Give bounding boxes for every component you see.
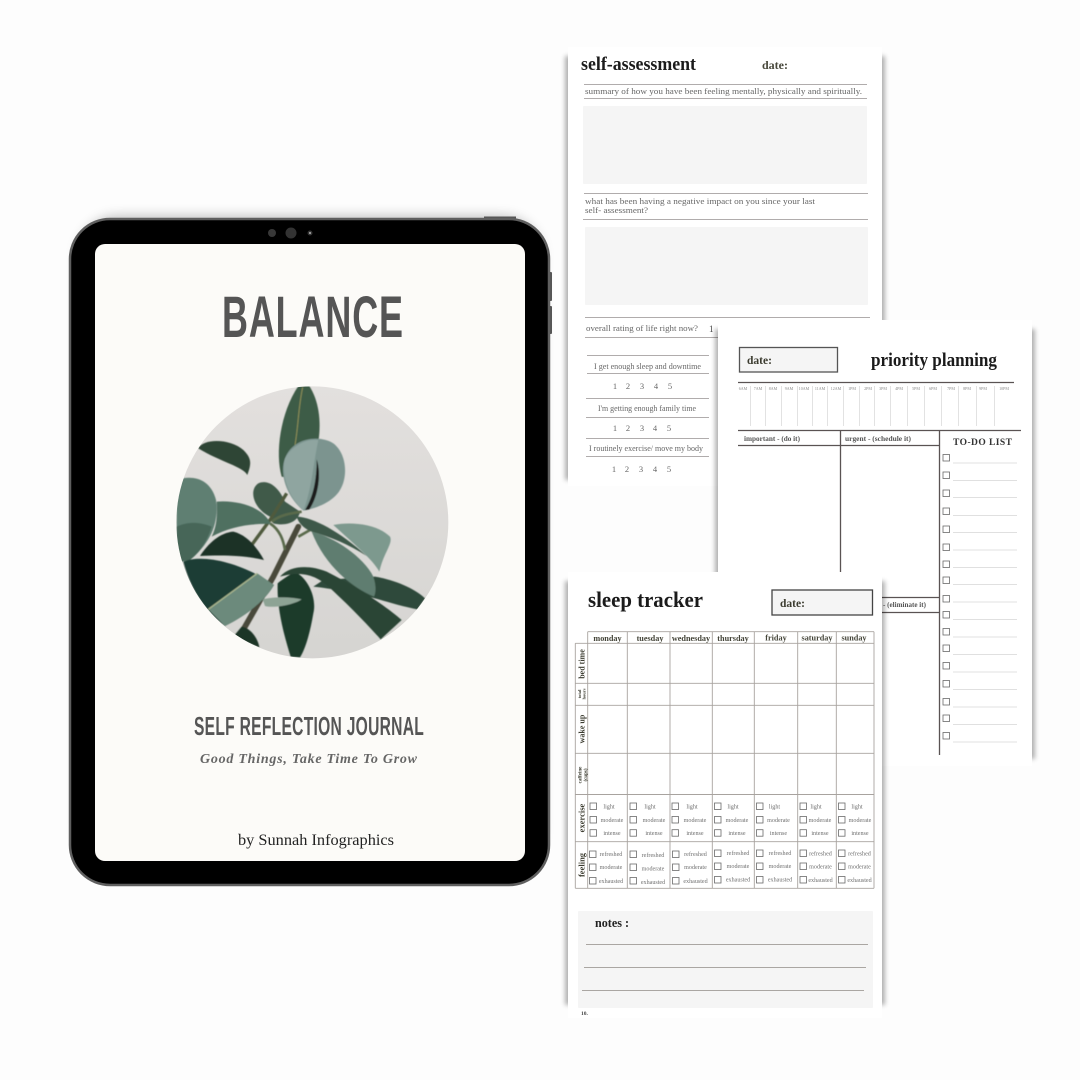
page: priority planning — [715, 320, 1035, 766]
answer box one — [583, 106, 867, 184]
infographic canvas — [68, 54, 1038, 1015]
rating item: sleep: 2 — [626, 381, 630, 391]
hourly timeline: 7PM — [947, 386, 955, 391]
weekday headers: saturday — [802, 634, 833, 642]
row labels: hours — [582, 688, 586, 700]
feeling labels — [599, 850, 872, 886]
page: sleep tracker — [565, 572, 885, 1018]
feeling labels: exhausted — [808, 878, 833, 884]
weekday headers: thursday — [717, 634, 750, 643]
rating item: sleep: 3 — [640, 381, 644, 391]
weekday headers: tuesday — [637, 634, 664, 643]
hourly timeline: 1PM — [848, 386, 856, 391]
sleep date box — [772, 590, 872, 615]
row labels — [576, 649, 589, 877]
exercise labels: light — [810, 804, 822, 810]
notes panel: notes : — [595, 916, 629, 930]
priority heading: priority planning — [871, 350, 997, 371]
row labels: exercise — [576, 803, 586, 832]
feeling labels: exhausted — [726, 878, 750, 884]
priority matrix — [738, 430, 1021, 755]
feeling labels: refreshed — [727, 850, 749, 857]
exercise labels: light — [851, 804, 863, 810]
prompt one: summary of how you have been feeling mentally, physically and spiritually. — [585, 86, 862, 96]
sleep date box: date: — [780, 596, 805, 610]
sleep sheet — [568, 572, 882, 1018]
feeling labels: refreshed — [642, 852, 664, 859]
to-do list heading: TO-DO LIST — [953, 438, 1013, 448]
priority matrix: important - (do it) — [744, 434, 800, 443]
exercise labels: intense — [770, 831, 787, 837]
feeling checkboxes — [590, 850, 845, 884]
feeling labels: refreshed — [600, 851, 622, 858]
weekday headers: wednesday — [672, 634, 711, 643]
hourly timeline: 10AM — [799, 386, 810, 391]
rating item: sleep: 5 — [668, 381, 672, 391]
author: by Sunnah Infographics — [238, 832, 394, 849]
weekday headers: sunday — [841, 634, 867, 642]
priority sheet — [718, 320, 1032, 766]
tablet cameras — [268, 228, 312, 238]
feeling labels: exhausted — [641, 880, 665, 886]
exercise labels: moderate — [643, 818, 666, 824]
priority date box: date: — [747, 353, 772, 367]
plant photo circle — [176, 386, 448, 658]
row labels: total — [577, 689, 582, 698]
rating item: sleep: I get enough sleep and downtime — [594, 361, 701, 371]
rating item: family — [586, 398, 709, 433]
overall rating: overall rating of life right now? — [586, 323, 698, 333]
rating item: sleep — [587, 356, 709, 391]
feeling labels: moderate — [684, 865, 707, 871]
exercise labels: intense — [811, 831, 829, 837]
exercise labels: intense — [728, 831, 746, 837]
hourly timeline: 5PM — [912, 386, 920, 391]
feeling labels: moderate — [600, 865, 623, 871]
feeling labels: exhausted — [768, 878, 792, 884]
exercise labels: moderate — [601, 818, 624, 824]
feeling labels: exhausted — [599, 879, 623, 885]
rating item: family: 4 — [653, 423, 658, 433]
hourly timeline: 9PM — [979, 386, 987, 391]
prompt two: self- assessment? — [585, 205, 648, 215]
feeling labels: refreshed — [769, 850, 791, 857]
weekday headers: monday — [593, 634, 623, 643]
exercise labels: light — [644, 804, 656, 810]
weekday headers: friday — [765, 634, 788, 642]
hourly timeline: 10PM — [999, 386, 1009, 391]
tablet mockup — [70, 216, 552, 885]
tablet screen — [95, 244, 525, 861]
rating item: exercise — [586, 438, 709, 474]
exercise checkboxes — [590, 803, 845, 836]
overall rating: 1 — [709, 324, 714, 334]
hourly timeline: 3PM — [879, 386, 887, 391]
rating item: family: 1 — [613, 423, 617, 433]
rating item: family: 2 — [626, 423, 630, 433]
rating item: family: 5 — [667, 423, 671, 433]
feeling labels: exhausted — [847, 878, 872, 884]
self-assessment heading: self-assessment — [581, 55, 697, 75]
tracker grid — [575, 632, 874, 888]
rating item: exercise: 1 — [612, 464, 616, 474]
rating item: sleep: 4 — [654, 381, 659, 391]
hourly timeline: 12AM — [831, 386, 842, 391]
rating item: exercise: 3 — [639, 464, 643, 474]
hourly timeline: 2PM — [864, 386, 872, 391]
tagline: Good Things, Take Time To Grow — [200, 752, 418, 767]
weekday headers — [593, 634, 867, 643]
prompt two: what has been having a negative impact on you since your last — [585, 196, 816, 206]
exercise labels: moderate — [849, 818, 872, 824]
sleep heading: sleep tracker — [588, 587, 703, 612]
exercise labels: intense — [686, 831, 704, 837]
exercise labels: intense — [851, 831, 869, 837]
row labels: caffeine — [578, 766, 584, 783]
prompt two — [585, 196, 816, 215]
page: self-assessment — [565, 47, 885, 486]
priority date box — [740, 348, 838, 372]
feeling labels: refreshed — [848, 850, 871, 858]
page number: 10. — [581, 1011, 588, 1017]
subtitle: SELF REFLECTION JOURNAL — [194, 712, 424, 741]
self-assessment sheet — [568, 47, 882, 486]
row labels: (cups) — [584, 768, 589, 782]
feeling labels: refreshed — [684, 851, 707, 858]
exercise labels: moderate — [684, 818, 707, 824]
to-do checkboxes — [943, 454, 950, 739]
feeling labels: moderate — [769, 864, 792, 870]
exercise labels: light — [686, 804, 698, 810]
rating item: family: 3 — [640, 423, 644, 433]
rating item: exercise: 2 — [625, 464, 629, 474]
tablet body — [70, 219, 549, 885]
row labels: bed time — [578, 649, 586, 679]
hourly timeline: 7AM — [754, 386, 763, 391]
row labels: feeling — [576, 852, 586, 877]
rating item: sleep: 1 — [613, 381, 617, 391]
hourly timeline — [738, 382, 1014, 426]
to-do lines — [953, 463, 1017, 742]
hourly timeline: 8PM — [963, 386, 971, 391]
hourly timeline: 11AM — [815, 386, 826, 391]
rating item: family: I'm getting enough family time — [598, 403, 696, 413]
exercise labels: light — [727, 804, 739, 810]
self-assessment date label: date: — [762, 60, 788, 72]
rating item: exercise: 4 — [653, 464, 658, 474]
priority matrix: urgent - (schedule it) — [845, 434, 911, 443]
exercise labels: intense — [603, 831, 621, 837]
feeling labels: moderate — [642, 866, 665, 872]
row labels: wake up — [578, 714, 586, 743]
rating item: exercise: I routinely exercise/ move my body — [589, 443, 704, 453]
feeling labels: exhausted — [683, 879, 708, 885]
hourly timeline: 6PM — [929, 386, 937, 391]
hourly timeline: 8AM — [769, 386, 778, 391]
exercise labels: intense — [645, 831, 663, 837]
exercise labels: moderate — [767, 818, 790, 824]
exercise labels: moderate — [726, 818, 749, 824]
hourly timeline: 9AM — [785, 386, 794, 391]
feeling labels: moderate — [848, 864, 871, 870]
exercise labels — [601, 804, 872, 837]
rating item: exercise: 5 — [667, 464, 671, 474]
tablet side buttons — [484, 216, 552, 334]
hourly timeline: 4PM — [895, 386, 903, 391]
exercise labels: moderate — [809, 818, 832, 824]
section rules — [583, 84, 870, 338]
hourly timeline: 6AM — [739, 386, 748, 391]
priority matrix: - (eliminate it) — [883, 600, 926, 609]
feeling labels: refreshed — [809, 850, 832, 858]
feeling labels: moderate — [727, 864, 750, 870]
exercise labels: light — [769, 804, 780, 810]
answer box two — [585, 227, 868, 305]
exercise labels: light — [603, 804, 615, 810]
notes panel — [578, 911, 873, 1008]
title: BALANCE — [222, 285, 403, 350]
feeling labels: moderate — [809, 864, 832, 870]
